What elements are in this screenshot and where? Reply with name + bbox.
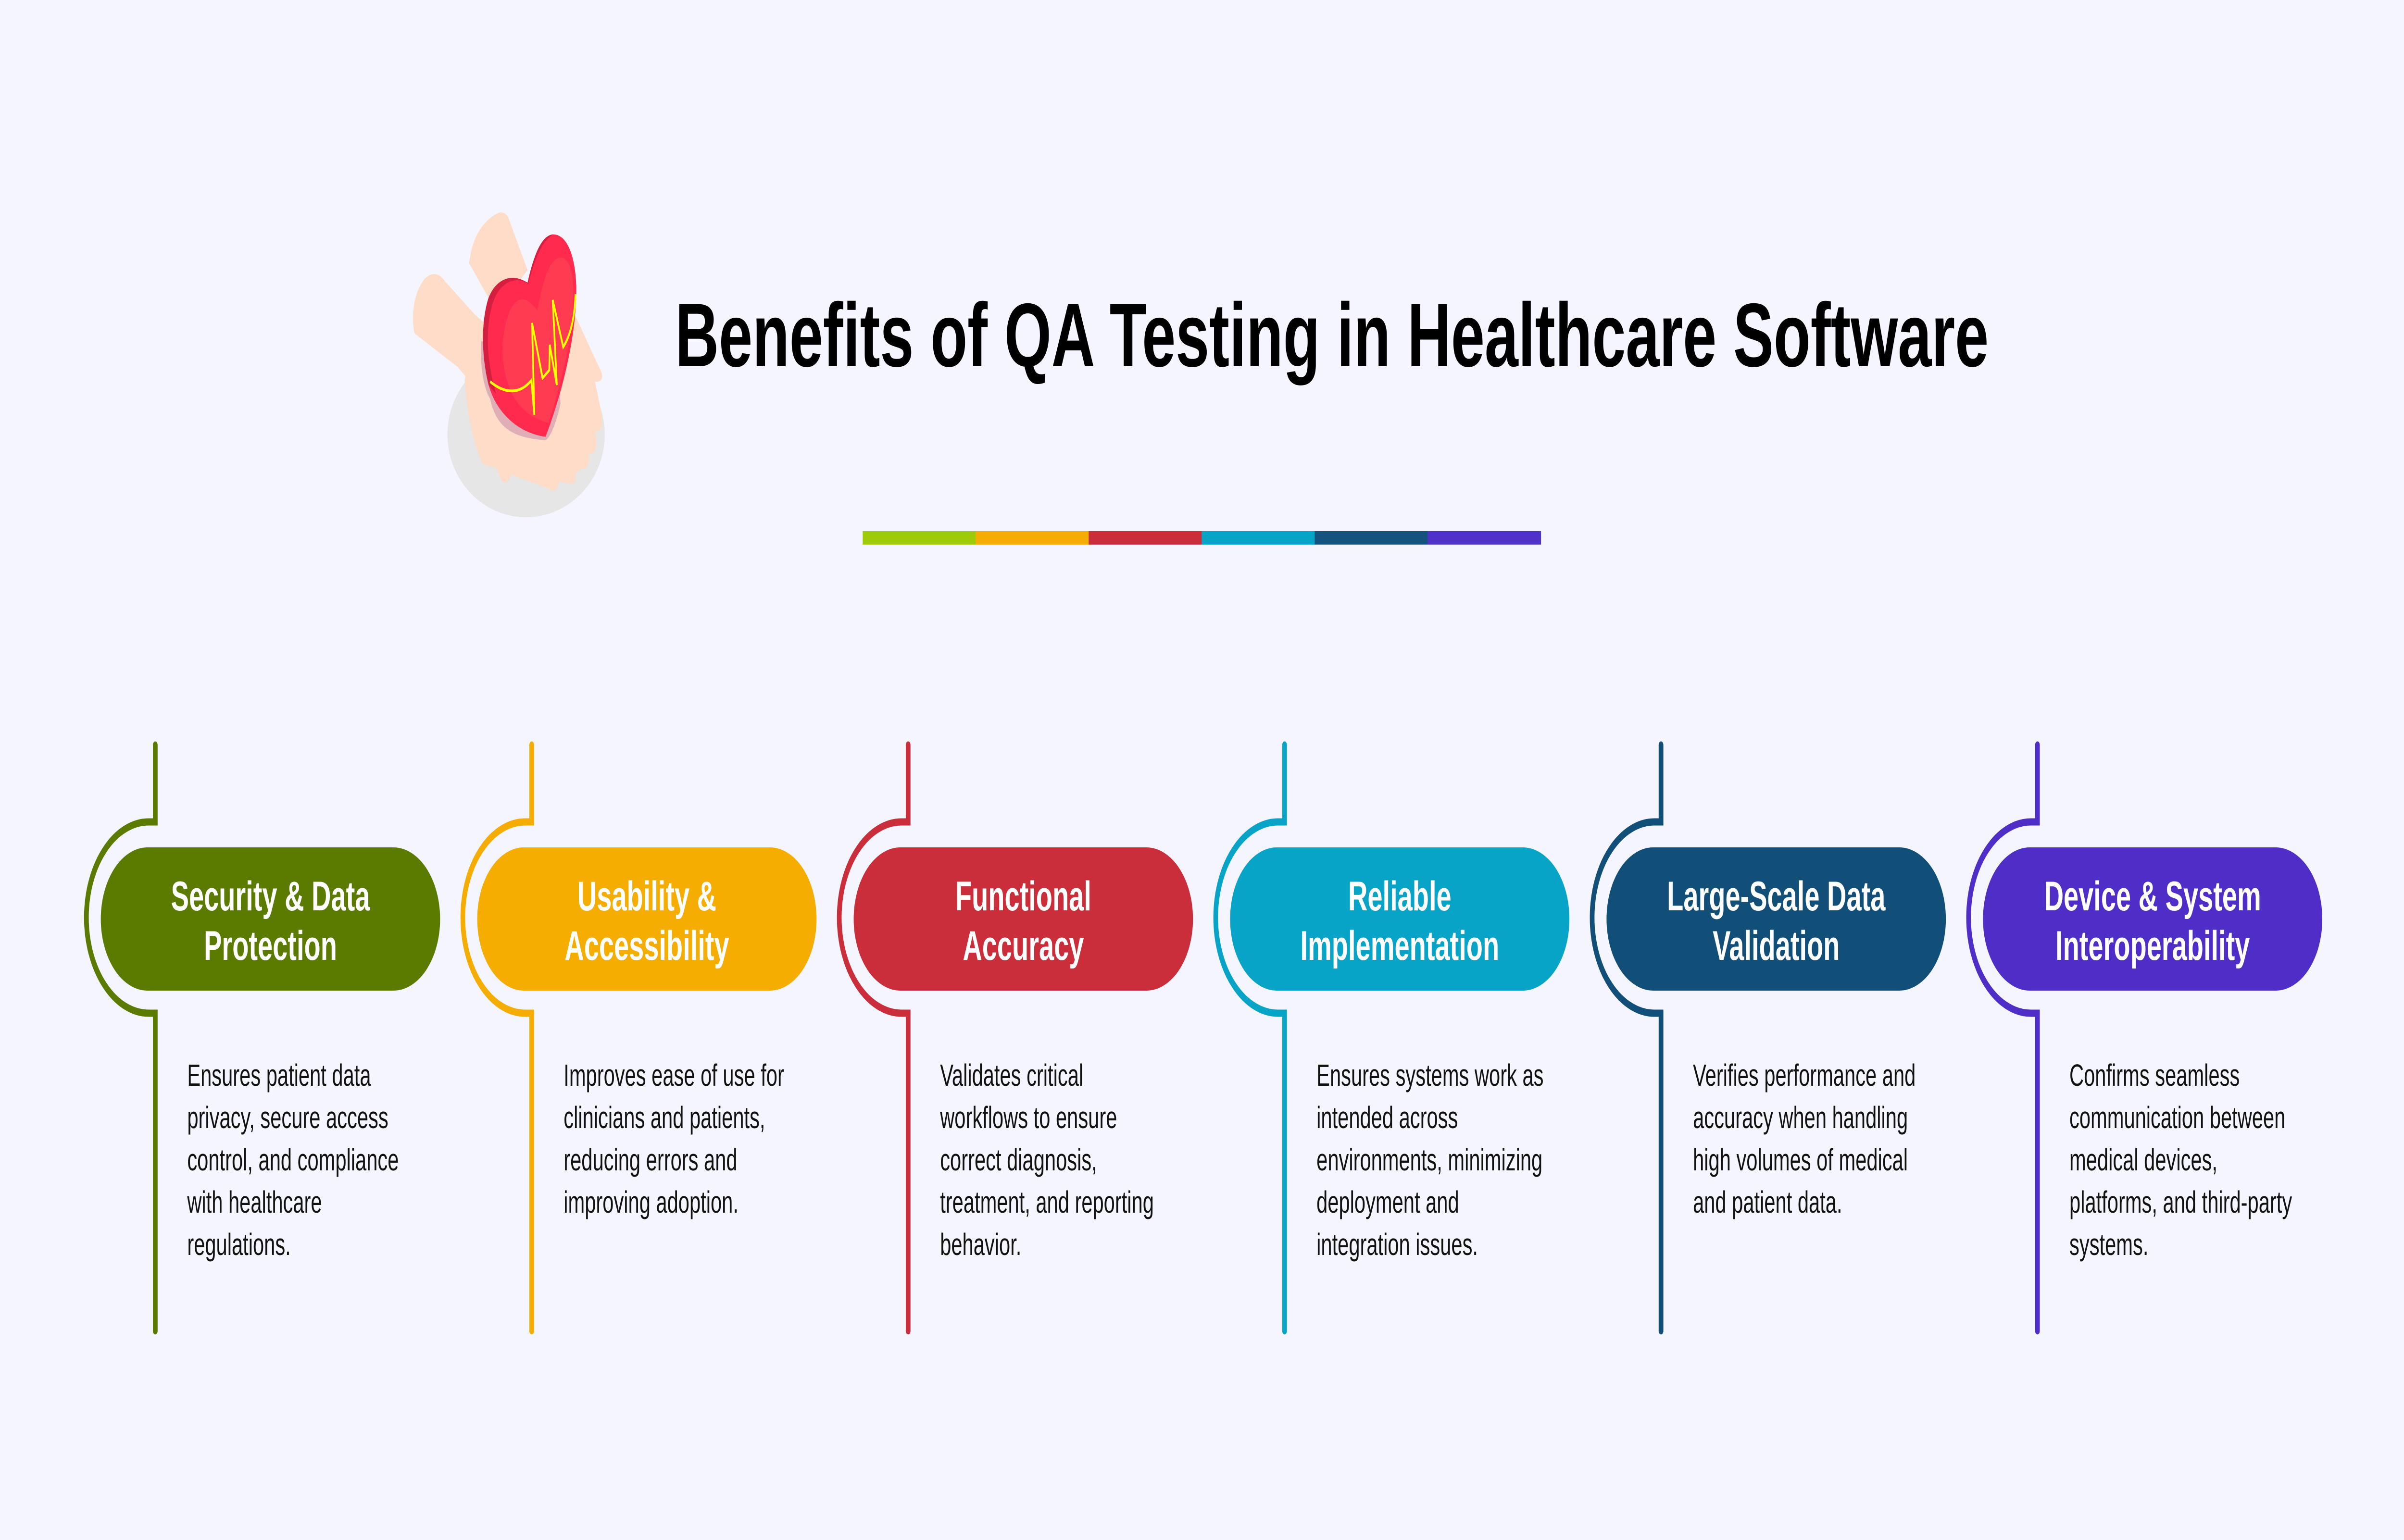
panel: large-scale data: accuracy when handling — [1693, 1101, 1908, 1135]
panel: functional accuracy: behavior. — [940, 1228, 1021, 1262]
panel: reliable implementation — [1216, 745, 1569, 1331]
panel: large-scale data: and patient data. — [1693, 1185, 1842, 1219]
panel: usability: improving adoption. — [563, 1185, 739, 1219]
panel: usability: reducing errors and — [563, 1143, 738, 1177]
panel: security: control, and compliance — [187, 1143, 399, 1177]
panel: large-scale data: high volumes of medical — [1693, 1143, 1908, 1177]
panel: functional accuracy: correct diagnosis, — [940, 1143, 1097, 1177]
panel: security: Security & Data — [171, 873, 370, 919]
panel: security: regulations. — [187, 1228, 291, 1262]
panel: security: privacy, secure access — [187, 1101, 388, 1135]
panel: reliable implementation: Ensures systems work as — [1316, 1058, 1544, 1093]
panel: functional accuracy: Validates critical — [940, 1058, 1083, 1093]
panel: functional accuracy — [839, 745, 1193, 1331]
panel: security — [87, 745, 440, 1331]
panel: reliable implementation: environments, minimizing — [1316, 1143, 1542, 1177]
panel: interoperability: Device & System — [2044, 873, 2261, 919]
panel: interoperability — [1968, 745, 2322, 1331]
title: Benefits of QA Testing in Healthcare Software — [675, 284, 1989, 385]
panel: reliable implementation: Implementation — [1300, 923, 1499, 969]
panel: reliable implementation: integration issues. — [1316, 1228, 1478, 1262]
panel: reliable implementation: intended across — [1316, 1101, 1458, 1135]
panel: interoperability: communication between — [2069, 1101, 2285, 1135]
panel: usability — [463, 745, 816, 1331]
panel: usability: Usability & — [577, 873, 716, 919]
panel: usability: clinicians and patients, — [563, 1101, 765, 1135]
panel: large-scale data: Verifies performance and — [1693, 1058, 1916, 1093]
panel: interoperability: Confirms seamless — [2069, 1058, 2240, 1093]
panel: large-scale data: Validation — [1713, 923, 1840, 969]
panel: reliable implementation: Reliable — [1348, 873, 1452, 919]
panel: large-scale data: Large-Scale Data — [1667, 873, 1886, 919]
panel: interoperability: medical devices, — [2069, 1143, 2217, 1177]
color bar — [863, 531, 1541, 545]
panel: usability: Improves ease of use for — [563, 1058, 784, 1093]
panel: interoperability: platforms, and third-party — [2069, 1185, 2292, 1219]
panel: functional accuracy: Functional — [955, 873, 1091, 919]
panel: interoperability: systems. — [2069, 1228, 2148, 1262]
panel: reliable implementation: deployment and — [1316, 1185, 1459, 1219]
icon: heart in hands — [413, 212, 605, 517]
panel: security: Ensures patient data — [187, 1058, 371, 1093]
panel: usability: Accessibility — [564, 923, 729, 969]
panel: interoperability: Interoperability — [2055, 923, 2250, 969]
panel: functional accuracy: workflows to ensure — [939, 1101, 1117, 1135]
panel: functional accuracy: treatment, and reporting — [940, 1185, 1154, 1219]
panel: security: Protection — [204, 923, 337, 969]
panel: security: with healthcare — [187, 1185, 322, 1219]
panel: functional accuracy: Accuracy — [963, 923, 1084, 969]
panel: large-scale data — [1592, 745, 1946, 1331]
